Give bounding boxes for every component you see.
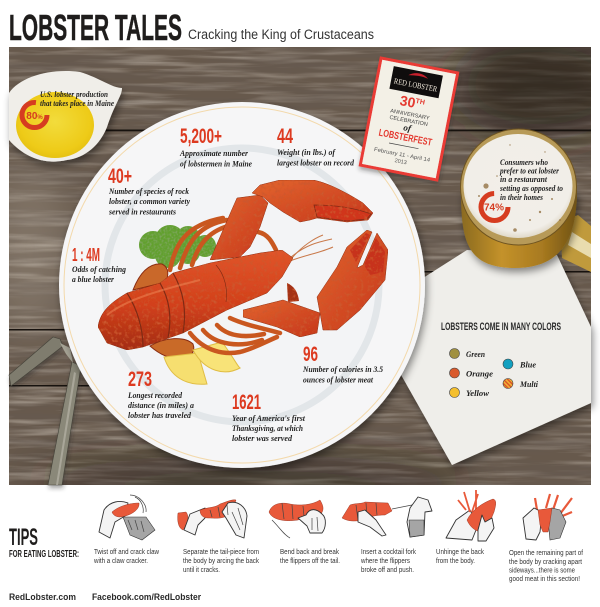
text: tip 6 — [509, 550, 583, 583]
stat: 5,200+: Approximate number — [179, 148, 249, 158]
text: dates — [372, 147, 430, 171]
text: tip 1: Twist off and crack claw — [94, 549, 160, 556]
legend: green — [450, 348, 485, 359]
tip 2: separate tail — [178, 500, 259, 574]
text: tip 2: the body by arcing the back — [183, 558, 259, 565]
stat: 273 — [127, 368, 195, 420]
stat: 40+ — [108, 165, 190, 216]
text: 30th anniversary: LOBSTERFEST — [378, 128, 433, 149]
text: bowl stat — [40, 89, 114, 108]
icon: hands separating tail — [178, 500, 247, 538]
lemons — [164, 342, 240, 384]
stat: 96: 96 — [303, 343, 318, 366]
icon: hands cracking claw — [99, 495, 155, 540]
panel: wooden table background — [9, 47, 591, 485]
footer links — [9, 592, 201, 602]
text: tip 6: Open the remaining part of — [509, 550, 583, 557]
text: tip 2: Separate the tail-piece from — [183, 549, 259, 556]
text: tip 3: the flippers off the tail. — [280, 558, 340, 565]
tail segments — [127, 265, 227, 347]
text: 30th anniversary: of — [403, 122, 413, 134]
text: tip 3 — [280, 549, 340, 565]
heading: tips: FOR EATING LOBSTER: — [9, 549, 79, 560]
stat: 1:4M — [72, 245, 127, 284]
heading: tips: TIPS — [9, 524, 38, 551]
logo: RED LOBSTER — [393, 77, 439, 94]
icon: lobster crackers on the table — [9, 337, 81, 485]
legs — [170, 218, 280, 353]
icon: foam — [464, 134, 572, 238]
text: tip 4: where the flippers — [360, 558, 410, 565]
upper claw — [210, 180, 373, 260]
stat: 5,200+: 5,200+ — [180, 125, 222, 148]
stat: 44: Weight (in lbs.) of — [277, 147, 336, 157]
subtitle: Cracking the King of Crustaceans — [188, 27, 374, 42]
text: tip 5 — [436, 549, 484, 565]
text: beer stat: Consumers who — [500, 157, 548, 167]
text: bowl stat: that takes place in Maine — [40, 98, 114, 108]
panel: beer mug stat — [460, 129, 591, 272]
text: beer stat: in a restaurant — [500, 174, 548, 184]
stat: 96: Number of calories in 3.5 — [302, 364, 384, 374]
icon: melted butter — [16, 92, 94, 158]
chart: 74% donut: 74% — [484, 202, 504, 214]
text: tip 6: the body by cracking apart — [509, 559, 582, 566]
stat: 40+: lobster, a common variety — [109, 196, 190, 206]
text: tip 2 — [183, 549, 259, 574]
text: beer stat: prefer to eat lobster — [499, 166, 560, 176]
text: beer stat: in their homes — [500, 192, 544, 202]
text: dates: 2013 — [394, 158, 407, 166]
footer links: RedLobster.com — [9, 592, 76, 602]
text: 30th anniversary: TH — [415, 98, 425, 107]
heading: tips — [9, 524, 79, 560]
tip 6: crack body sideways — [509, 494, 583, 583]
stat: 5,200+ — [179, 125, 252, 168]
lower claw — [243, 230, 388, 337]
stat: 1:4M: 1 : 4M — [72, 245, 100, 265]
icon: mug rim — [460, 129, 576, 245]
text: beer stat: setting as opposed to — [499, 183, 563, 193]
icon: hands unhinging back — [446, 490, 496, 541]
legend: orange — [450, 368, 493, 378]
stat: 273: Longest recorded — [127, 390, 183, 400]
stat: 1:4M: a blue lobster — [72, 274, 115, 284]
text: 30th anniversary: CELEBRATION — [389, 115, 428, 128]
text: 30th anniversary — [378, 89, 440, 149]
tip 3: bend flippers — [269, 500, 340, 565]
legend: blue: Blue — [519, 360, 536, 370]
icon: hands inserting cocktail fork — [342, 497, 432, 537]
tip 1: crack claw — [93, 495, 160, 565]
icon: mug handle — [560, 215, 591, 272]
stat: 40+: 40+ — [108, 165, 132, 188]
stat: 1621: lobster was served — [232, 433, 293, 443]
stat: 1:4M: Odds of catching — [72, 264, 127, 274]
text: tip 4: broke off and push. — [361, 567, 414, 574]
parsley — [139, 225, 216, 268]
legend: yellow — [450, 388, 489, 398]
stat: 40+: Number of species of rock — [108, 186, 190, 196]
antennae — [290, 235, 333, 261]
stat: 1621 — [232, 391, 306, 443]
text: tip 2: until it cracks. — [183, 567, 220, 574]
icon: hand bending flippers — [269, 500, 325, 538]
stat: 44: 44 — [277, 125, 293, 148]
text: dates: February 11 - April 14 — [373, 147, 430, 164]
icon: hands opening body — [523, 494, 572, 540]
stat: 273: distance (in miles) a — [128, 400, 195, 410]
text: tip 5: Unhinge the back — [436, 549, 484, 556]
text: tip 1: with a claw cracker. — [93, 558, 148, 565]
panel: plate — [59, 102, 425, 468]
tip 5: unhinge back — [436, 490, 496, 565]
text: tip 5: from the body. — [436, 558, 475, 565]
text: 30th anniversary: 30 — [398, 92, 417, 111]
text: beer stat — [499, 157, 563, 202]
stat: 40+: served in restaurants — [108, 206, 177, 216]
stat: 273: lobster has traveled — [128, 410, 192, 420]
stat: 1621: 1621 — [232, 391, 261, 414]
stat: 96: ounces of lobster meat — [303, 374, 374, 384]
stat: 96 — [302, 343, 384, 384]
chart: 74% donut — [481, 194, 508, 220]
text: tip 6: sideways...there is some — [509, 568, 575, 574]
text: tip 3: Bend back and break — [280, 549, 339, 556]
legend: yellow: Yellow — [466, 388, 489, 398]
chart: 80% donut: 80% — [26, 111, 43, 122]
legend: multi: Multi — [519, 379, 539, 389]
legend: blue — [503, 359, 536, 370]
text: tip 6: good meat in this section! — [509, 576, 580, 583]
icon: mug body — [461, 190, 577, 268]
text: tip 4 — [360, 549, 416, 574]
panel: event card — [360, 58, 458, 180]
legend: orange: Orange — [466, 368, 493, 378]
lobster body — [98, 250, 293, 350]
stat: 5,200+: of lobstermen in Maine — [180, 158, 252, 168]
title: LOBSTER TALES — [9, 7, 182, 48]
icon: bowl — [9, 71, 122, 162]
legend: multi — [503, 378, 539, 389]
tip 4: cocktail fork — [342, 497, 432, 574]
stat: 1621: Thanksgiving, at which — [232, 423, 303, 433]
text: tip 4: Insert a cocktail fork — [361, 549, 416, 556]
stat: 44 — [277, 125, 355, 168]
footer links: Facebook.com/RedLobster — [92, 592, 201, 602]
panel: napkin with lobster colors legend — [400, 250, 591, 465]
illustration: lobster on plate — [98, 180, 388, 384]
text: tip 1 — [93, 549, 160, 565]
legend: green: Green — [466, 349, 485, 359]
text: 30th anniversary: ANNIVERSARY — [390, 108, 430, 122]
stat: 273: 273 — [128, 368, 152, 391]
tail flippers — [133, 264, 168, 290]
panel: butter bowl stat — [9, 71, 122, 162]
text: bowl stat: U.S. lobster production — [40, 89, 108, 99]
stat: 1621: Year of America's first — [232, 413, 306, 423]
stat: 44: largest lobster on record — [277, 158, 355, 168]
